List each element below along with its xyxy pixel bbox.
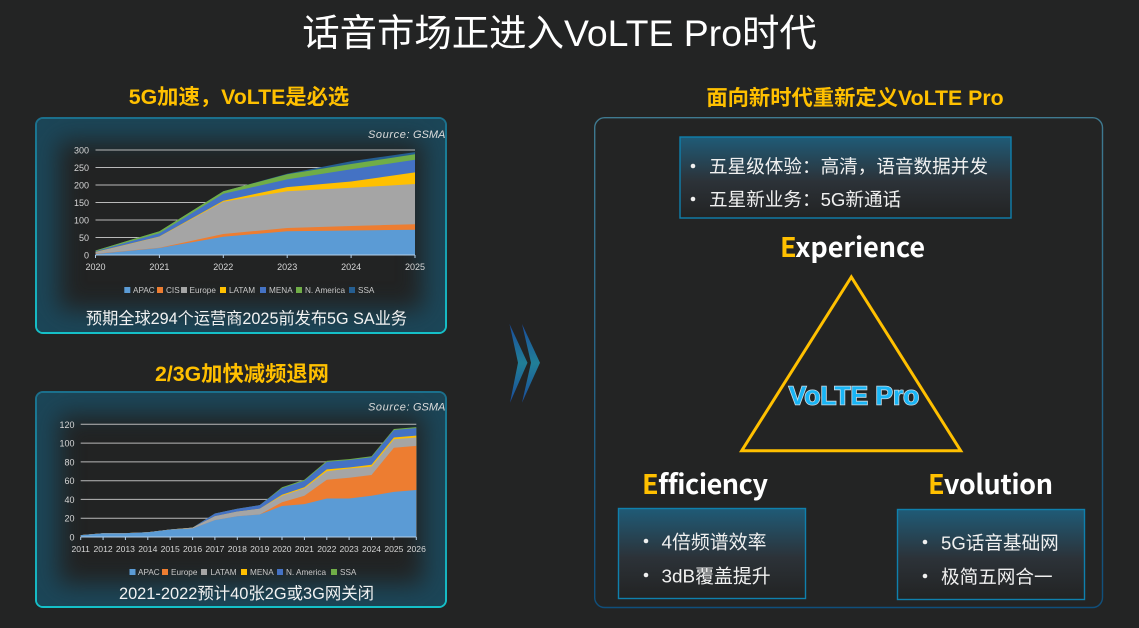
label: Evolution: Evolution xyxy=(928,463,1053,502)
chart legend xyxy=(124,286,375,295)
chart legend: MENA xyxy=(269,286,293,295)
heading: redefine VoLTE Pro: 面向新时代重新定义VoLTE Pro xyxy=(706,86,1004,110)
area chart: network closures 2011-2026: 2017 xyxy=(205,544,225,554)
area chart: network closures 2011-2026: 2013 xyxy=(116,544,135,554)
area chart: network closures 2011-2026: 2023 xyxy=(340,544,359,554)
area chart: network closures 2011-2026: 2024 xyxy=(362,544,381,554)
chart legend: SSA xyxy=(340,568,357,577)
source note: GSMA xyxy=(413,129,445,141)
area chart: network closures 2011-2026: 2016 xyxy=(183,544,202,554)
area chart: 5G SA launches 2020-2025: 250 xyxy=(74,163,89,173)
area chart: network closures 2011-2026: 2022 xyxy=(317,544,337,554)
box: evolution bullets xyxy=(898,510,1084,600)
area chart: network closures 2011-2026: 60 xyxy=(64,476,74,486)
area chart: 5G SA launches 2020-2025: 2024 xyxy=(341,262,361,272)
caption: 2021-2022预计40张2G或3G网关闭 xyxy=(119,585,374,603)
area chart: 5G SA launches 2020-2025: 2022 xyxy=(213,262,233,272)
area chart: network closures 2011-2026: 2021 xyxy=(295,544,314,554)
box: evolution bullets: 极简五网合一 xyxy=(941,566,1053,588)
area chart: network closures 2011-2026: 2014 xyxy=(138,544,158,554)
area chart: network closures 2011-2026: 2020 xyxy=(272,544,292,554)
chart legend: APAC xyxy=(138,568,160,577)
heading: 5G acceleration: 5G加速，VoLTE是必选 xyxy=(129,85,349,109)
area chart: network closures 2011-2026: 2019 xyxy=(250,544,269,554)
chart legend: CIS xyxy=(166,286,180,295)
area chart: 5G SA launches 2020-2025 xyxy=(74,146,425,272)
area chart: network closures 2011-2026: 0 xyxy=(69,532,74,542)
box: experience bullets: 五星新业务：5G新通话 xyxy=(709,189,901,210)
title: 话音市场正进入VoLTE Pro时代 xyxy=(302,12,817,54)
arrow: double chevron xyxy=(510,324,540,402)
triangle with VoLTE Pro xyxy=(742,277,961,451)
area chart: network closures 2011-2026: 2011 xyxy=(71,544,90,554)
area chart: network closures 2011-2026: 40 xyxy=(64,495,74,505)
chart legend: Europe xyxy=(190,286,216,295)
area chart: 5G SA launches 2020-2025: 200 xyxy=(74,180,89,190)
label: Experience: Experience xyxy=(780,226,925,265)
caption: 预期全球294个运营商2025前发布5G SA业务 xyxy=(86,310,407,328)
area chart: network closures 2011-2026: 2026 xyxy=(407,544,426,554)
box: evolution bullets: 5G话音基础网 xyxy=(941,532,1059,554)
box: efficiency bullets xyxy=(618,508,806,598)
area chart: 5G SA launches 2020-2025: 0 xyxy=(84,250,89,260)
box: experience bullets: 五星级体验：高清，语音数据并发 xyxy=(709,156,988,177)
area chart: network closures 2011-2026: 120 xyxy=(59,420,74,430)
box: efficiency bullets: 3dB覆盖提升 xyxy=(662,566,771,588)
panel: 2G/3G shutdown chart xyxy=(35,391,447,608)
area chart: network closures 2011-2026: 2015 xyxy=(161,544,180,554)
source note: Source: xyxy=(368,129,410,141)
chart legend xyxy=(130,568,357,577)
panel: 5G SA chart xyxy=(35,117,447,334)
area chart: network closures 2011-2026 xyxy=(59,420,426,554)
area chart: network closures 2011-2026: 80 xyxy=(64,457,74,467)
source note: GSMA xyxy=(413,402,445,414)
area chart: network closures 2011-2026: 2018 xyxy=(228,544,247,554)
box: experience bullets xyxy=(680,137,1011,218)
chart legend: SSA xyxy=(358,286,375,295)
chart legend: LATAM xyxy=(229,286,255,295)
area chart: 5G SA launches 2020-2025: 2020 xyxy=(85,262,106,272)
chart legend: N. America xyxy=(286,568,326,577)
area chart: 5G SA launches 2020-2025: 100 xyxy=(74,216,89,226)
source note: Source: xyxy=(368,402,410,414)
box: efficiency bullets: 4倍频谱效率 xyxy=(662,532,766,554)
area chart: 5G SA launches 2020-2025: 2023 xyxy=(277,262,297,272)
area chart: 5G SA launches 2020-2025: 150 xyxy=(74,198,89,208)
area chart: network closures 2011-2026: 100 xyxy=(59,439,74,449)
area chart: network closures 2011-2026: 20 xyxy=(64,514,74,524)
area chart: network closures 2011-2026: 2012 xyxy=(94,544,113,554)
area chart: 5G SA launches 2020-2025: 2021 xyxy=(149,262,169,272)
chart legend: MENA xyxy=(250,568,274,577)
area chart: network closures 2011-2026: 2025 xyxy=(384,544,404,554)
heading: 2/3G refarming: 2/3G加快减频退网 xyxy=(155,362,329,386)
chart legend: N. America xyxy=(305,286,345,295)
area chart: 5G SA launches 2020-2025: 50 xyxy=(79,233,89,243)
area chart: 5G SA launches 2020-2025: 300 xyxy=(74,146,89,156)
panel: VoLTE Pro xyxy=(594,117,1104,608)
chart legend: LATAM xyxy=(210,568,237,577)
chart legend: APAC xyxy=(133,286,155,295)
area chart: 5G SA launches 2020-2025: 2025 xyxy=(405,262,425,272)
triangle with VoLTE Pro: VoLTE Pro xyxy=(789,380,919,410)
label: Efficiency: Efficiency xyxy=(642,463,768,502)
chart legend: Europe xyxy=(171,568,198,577)
